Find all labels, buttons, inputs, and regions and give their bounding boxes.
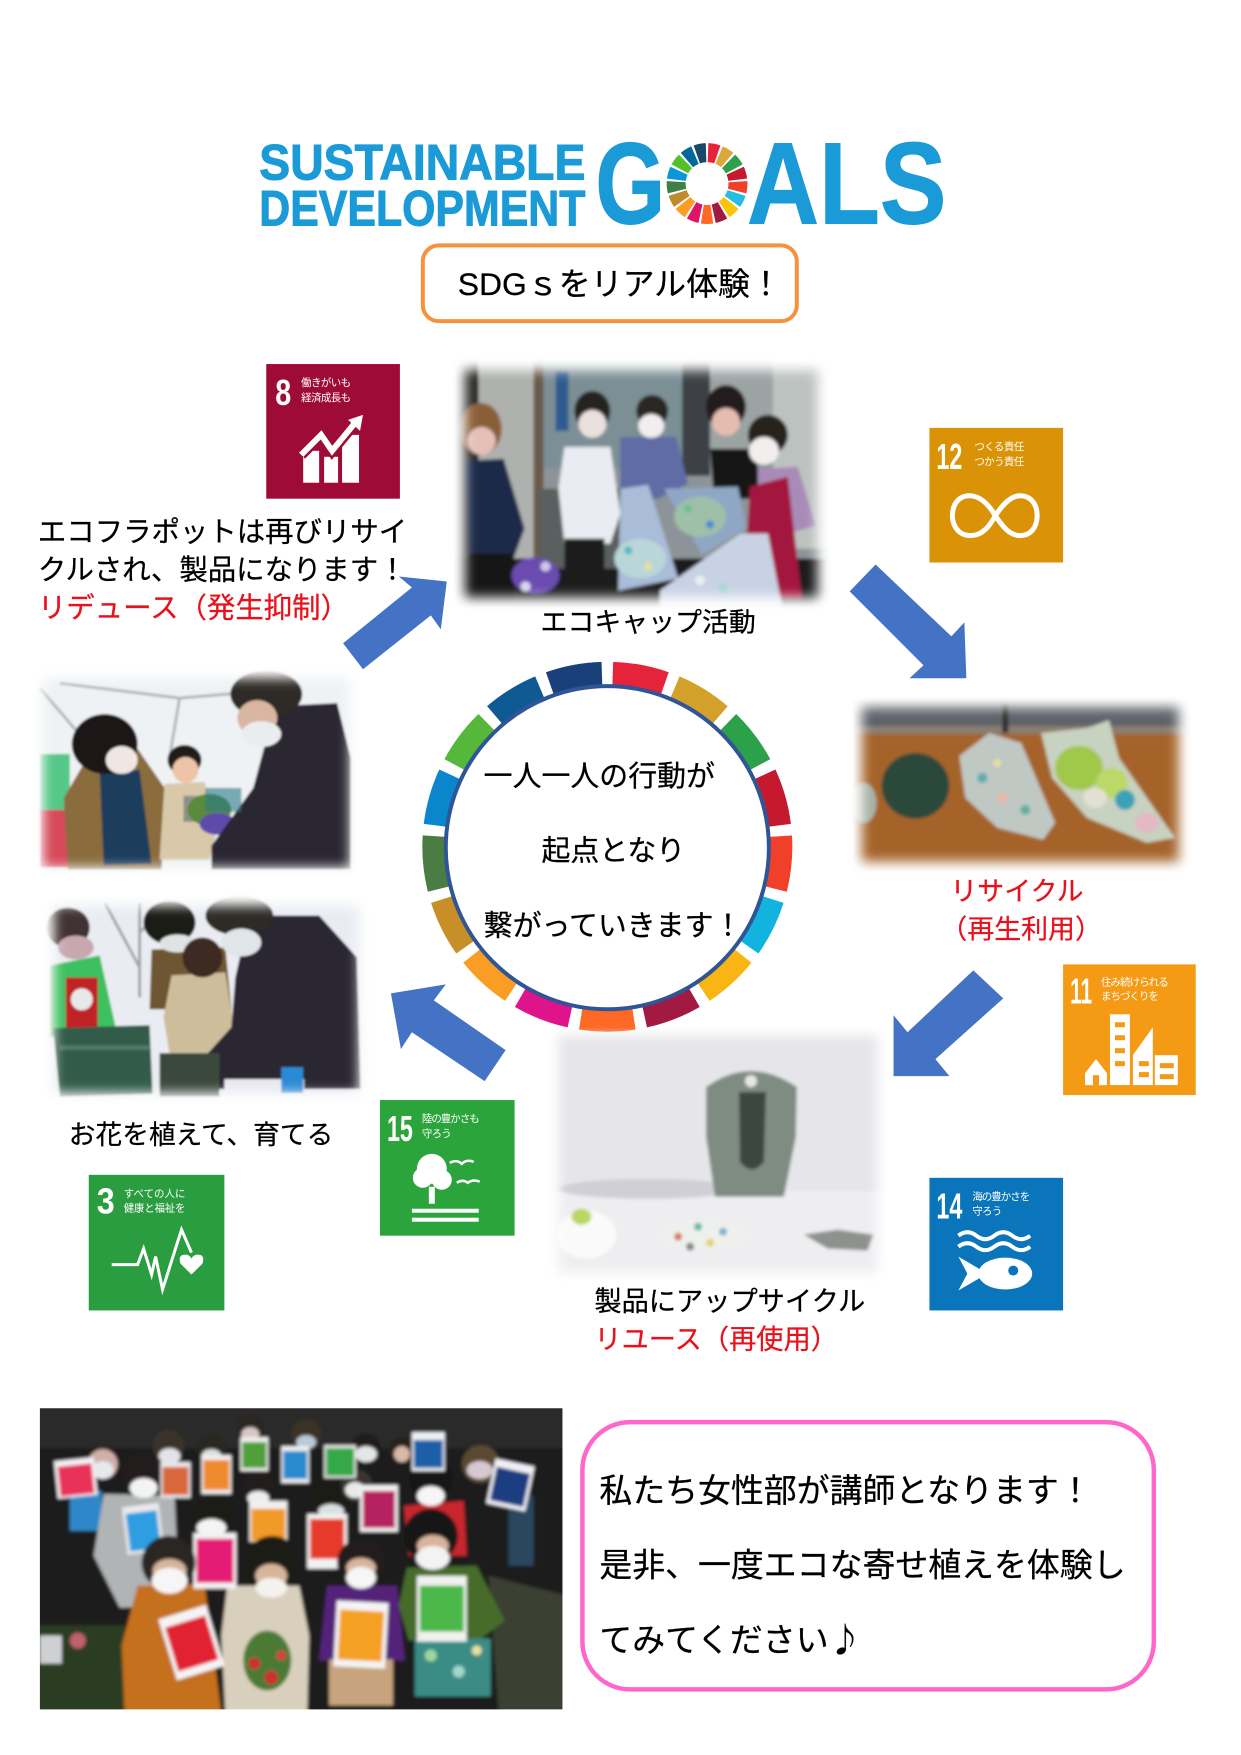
SDG tile 12: 12 [936,437,962,477]
SDG tile 11 [1063,964,1196,1095]
SDG tile 14 [929,1178,1063,1310]
photo: woman, child and man with flower pot [39,670,352,871]
caption: upcycle and reuse [594,1285,865,1354]
logo colour wheel [663,140,751,227]
caption: recycle: リサイクル [950,877,1084,907]
callout text [599,1472,1126,1662]
SDG tile 14: 14 [936,1187,962,1227]
SDG tile 15: 15 [387,1109,413,1149]
inner circle [446,686,769,1009]
front row heads [142,1536,195,1590]
title text: SDGｓをリアル体験！ [458,266,782,302]
person 3 [620,437,688,499]
placards [54,1457,98,1499]
SDG tile 14: 海の豊かさを [972,1190,1030,1203]
caption: upcycle and reuse: 製品にアップサイクル [594,1285,865,1316]
SDG tile 8: 働きがいも [301,376,351,389]
back row heads [88,1449,118,1479]
callout text: 是非、一度エコな寄せ植えを体験し [599,1547,1126,1584]
photo: recycled cap bags [851,698,1192,873]
arrow: recycling to product [894,970,1003,1076]
person 4 [710,449,764,499]
title box outline [423,245,797,321]
caption: plant and grow flowers: お花を植えて、育てる [69,1120,333,1150]
photo: eco cap activity group [454,359,833,608]
caption: upcycle and reuse: リユース（再使用） [594,1323,838,1354]
SDG tile 8: 経済成長も [301,391,351,404]
SDG tile 3 [89,1175,224,1310]
SDG tile 8: 8 [275,373,291,413]
title box [423,245,797,321]
SDG tile 11: 11 [1070,971,1092,1011]
photo: upcycled product [548,1027,888,1282]
SDG tile 3: 3 [97,1182,115,1222]
SDG tile 15 [380,1100,515,1236]
caption: recycle: （再生利用） [940,914,1102,944]
center message: 起点となり [542,836,685,868]
center circle with SDG ring [365,604,850,1089]
flower bouquet [243,1631,291,1690]
flowers [512,558,559,593]
text block: reduce [38,517,407,624]
SDG tile 11: 住み続けられる [1101,975,1169,988]
bags [618,485,678,590]
SDG tile 3: 健康と福祉を [124,1202,185,1215]
SDG tile 12: つかう責任 [974,455,1025,468]
logo wordmark small: SUSTAINABLE [259,135,585,191]
text block: reduce: リデュース（発生抑制） [38,592,349,624]
person 1 [465,459,525,559]
center message: 繋がっていきます！ [484,910,742,942]
arrow: eco cap to recycling [850,565,966,678]
SDG tile 15: 陸の豊かさも [422,1112,480,1125]
clothes [94,1494,180,1608]
photo: planting flowers together [46,896,362,1098]
center message: 一人一人の行動が [484,761,715,793]
person 5 [758,467,816,534]
logo: Sustainable Development Goals [259,118,946,248]
arrow: flower photos to eco cap [343,576,447,669]
callout text: てみてください♪ [599,1615,861,1662]
person 2 [558,447,620,544]
logo letters ALS: ALS [747,118,946,248]
SDG tile 14: 守ろう [972,1206,1002,1218]
text block: reduce: エコフラポットは再びリサイ [38,517,407,549]
text block: reduce: クルされ、製品になります！ [38,554,407,586]
ring segments [365,604,850,1089]
SDG tile 12: つくる責任 [974,440,1025,453]
callout outline [582,1422,1154,1689]
SDG tile 3: すべての人に [124,1188,185,1200]
logo wordmark small [259,135,585,236]
center message [484,761,742,942]
SDG tile 11: まちづくりを [1101,990,1159,1002]
caption: eco cap activity: エコキャップ活動 [541,607,756,637]
callout: women's division lecturers [582,1422,1154,1689]
SDG tile 15: 守ろう [422,1128,452,1140]
SDG tile 12 [929,428,1063,563]
logo letter G: G [595,118,665,248]
logo wordmark small: DEVELOPMENT [259,180,585,236]
callout text: 私たち女性部が講師となります！ [599,1472,1092,1509]
caption: recycle [940,877,1102,944]
SDG tile 8 [266,364,400,499]
arrow: product to flower planting [391,984,506,1081]
photo: women's group holding SDG placards [36,1404,566,1713]
